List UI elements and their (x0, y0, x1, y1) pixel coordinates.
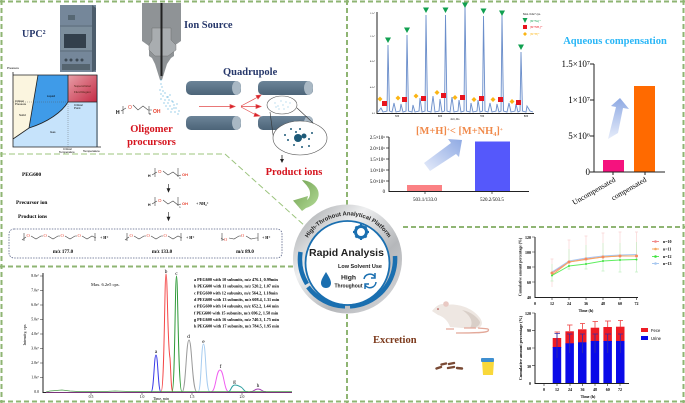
label: oligomer procursors: procursors (127, 137, 176, 148)
chart axes: Time, min (153, 397, 169, 402)
chart: phase diagram: Pressure (7, 66, 19, 70)
panel: mass spectrum and charts (370, 2, 667, 207)
legend: spectrum ions: [M+H]⁺ (530, 32, 540, 36)
label: high throughput: High (341, 274, 356, 282)
chart: cumulative stacked bar chart: 0 (529, 381, 531, 386)
peak labels: f (220, 363, 222, 370)
legend: stacked bars (641, 328, 662, 341)
chart: phase diagram: Critical (63, 147, 72, 151)
arrow: gradient up compensation (608, 98, 629, 139)
chart: cumulative line chart: Time (h) (579, 308, 594, 313)
chart: cumulative line chart: 36 (584, 301, 588, 306)
icon: magnified product ions (267, 96, 327, 163)
chart: adduct bar chart (370, 135, 529, 203)
chart axes: 3.0e⁷ (31, 346, 40, 350)
chart: mass spectrum: 800 (524, 115, 529, 118)
callout: product ion fragments: O (78, 233, 82, 238)
callout: product ion fragments: O (241, 233, 245, 238)
callout: product ion fragments: + H⁺ (186, 235, 195, 240)
peak labels: d (187, 334, 190, 340)
chart: compensation bars: 5×10⁶ (568, 131, 590, 141)
chart: cumulative stacked bar chart: 0 (543, 387, 545, 392)
callout: product ion fragments: m/z 89.0 (236, 250, 254, 255)
legend: spectrum ions: [M+Na]⁺ (530, 19, 541, 23)
callout: product ion fragments: O (224, 237, 228, 242)
legend: PEG600 subunits (194, 277, 280, 329)
arrows: ion path (199, 95, 261, 116)
molecule: PEG600 (148, 168, 188, 180)
chart: mass spectrum: 500 (395, 115, 400, 118)
icon: spray droplets (160, 80, 179, 114)
chart: adduct bar chart: 2.0×10⁶ (370, 146, 385, 152)
chart: mass spectrum: m/z, Da (451, 118, 460, 121)
legend: PEG600 subunits: a PEG600 with 10 subunits, m/z 476.1, 0.99min (194, 277, 279, 282)
chart: cumulative line chart: 12 (550, 301, 554, 306)
molecule: PEG600: H (148, 174, 151, 178)
chart: compensation bars: compensated (610, 175, 648, 202)
label: product ions row: Product ions (18, 214, 47, 220)
callout: product ion fragments: O (146, 233, 150, 238)
chart axes: Intensity, cps (22, 324, 28, 346)
icon: oligomer molecule: O (128, 105, 132, 111)
molecule: precursor: O (158, 198, 162, 203)
chart axes (22, 273, 292, 402)
chart axes: 0.5 (89, 395, 93, 399)
label: high throughput (334, 274, 363, 290)
chart: cumulative stacked bar chart: 90 (527, 328, 531, 333)
legend: spectrum ions (522, 13, 543, 36)
chart: cumulative stacked bar chart: 12 (555, 387, 559, 392)
chart: phase diagram: Supercritical (74, 84, 91, 88)
heading: adduct comparison: [M+H] (416, 126, 447, 137)
chart: adduct bar chart: 503.1/133.0 (413, 198, 437, 203)
chart: compensation bars: 1.5×10⁷ (562, 59, 590, 69)
callout: product ion fragments: O (130, 233, 134, 238)
chart: phase diagram: Point (74, 106, 81, 110)
chart: adduct bar chart: 520.2/503.5 (480, 198, 504, 203)
heading: excretion: Excretion (373, 335, 417, 346)
chart: adduct bar chart: 1.5×10⁶ (370, 157, 385, 163)
icon: refresh (364, 273, 376, 289)
icon: urine cup (481, 358, 494, 375)
chart: cumulative line chart (518, 232, 638, 313)
chart axes: 2.0 (240, 395, 244, 399)
legend: PEG600 subunits: c PEG600 with 12 subunits, m/z 564.2, 1.18min (194, 290, 278, 295)
molecule: PEG600: OH (182, 172, 188, 177)
chart: cumulative line chart: 60 (527, 280, 531, 285)
chart: phase diagram: Critical (74, 103, 83, 107)
icon: rat (432, 301, 489, 333)
icon: feces (436, 363, 462, 368)
chart: mass spectrum: 700 (480, 115, 485, 118)
molecule: precursor: + NH₄⁺ (196, 201, 209, 206)
callout: product ion fragments: + H⁺ (262, 235, 271, 240)
callout: product ion fragments: O (26, 233, 30, 238)
heading: Ion Source: Ion Source (184, 20, 233, 31)
chart: cumulative stacked bar chart: 120 (525, 311, 531, 316)
label: oligomer procursors (127, 124, 176, 148)
chart: cumulative line chart: 0 (534, 301, 536, 306)
icon: oligomer molecule: n (149, 112, 151, 116)
chart: cumulative line chart: 80 (527, 265, 531, 270)
chart: cumulative stacked bar chart: 30 (527, 364, 531, 369)
chart: adduct bar chart: 1.0×10⁶ (370, 168, 385, 174)
chart axes: 0.0 (34, 390, 39, 394)
panel: PEG600 fragmentation (9, 168, 282, 258)
chart: mass spectrum: 1.5e⁷ (370, 12, 375, 15)
label: product ions: Product ions (266, 167, 322, 178)
panel: ion source and quadrupole (116, 3, 327, 178)
chart: adduct bar chart: 5.0×10⁵ (370, 179, 385, 185)
label: oligomer procursors: Oligomer (130, 124, 173, 135)
icon: UPC2 instrument (60, 5, 96, 72)
chart: cumulative stacked bar chart: 36 (580, 387, 584, 392)
arrow: down (167, 184, 170, 192)
chart: phase diagram: Critical (15, 99, 24, 103)
callout: product ion fragments: O (164, 233, 168, 238)
chart: mass spectrum: 0.0 (372, 112, 376, 115)
heading: aqueous compensation: Aqueous compensation (563, 36, 667, 47)
callout: product ion fragments: + H⁺ (100, 235, 109, 240)
chart axes: 7.0e⁷ (31, 288, 40, 292)
chart: cumulative line chart: 24 (567, 301, 571, 306)
chart: phase diagram: Temperature (59, 150, 75, 154)
peak labels: h (257, 383, 260, 389)
peak labels: b (165, 269, 168, 275)
legend: stacked bars: Fece (651, 328, 661, 333)
legend: line chart (652, 239, 672, 266)
legend: line chart: n=10 (663, 239, 672, 244)
legend: line chart: n=11 (663, 246, 671, 252)
chart: cumulative stacked bar chart: Cumulative amount percentage (%) (518, 315, 523, 380)
chart: compensation bars: 1×10⁷ (568, 95, 590, 105)
chart axes: 6.0e⁷ (31, 303, 40, 307)
peak labels: g (233, 379, 236, 385)
heading: UPC2: 2 (43, 30, 46, 36)
chart: mass spectrum: 8.0e⁶ (370, 60, 375, 63)
chart: compensation bars: 0 (586, 167, 590, 177)
label: precursor ion: Precursor ion (16, 200, 47, 206)
chart: cumulative line chart: Cumulative amount percentage (%) (518, 237, 522, 296)
legend: PEG600 subunits: b PEG600 with 11 subunits, m/z 520.2, 1.07 min (194, 284, 280, 289)
chart: phase diagram: Solid (19, 113, 26, 117)
chart axes: 1.0 (140, 395, 144, 399)
chart: cumulative line chart: 40 (527, 295, 531, 300)
label: max intensity: Max. 6.2e5 cps. (91, 282, 120, 287)
chart: cumulative stacked bar chart: 72 (618, 387, 622, 392)
callout: product ion fragments: m/z 177.0 (53, 250, 74, 255)
heading: UPC2: UPC (22, 29, 43, 40)
arc text: platform: High-Throhout Analytical Platform (304, 211, 390, 238)
chart: mass spectrum: 4.0e⁶ (370, 86, 375, 89)
icon: oligomer molecule: OH (153, 109, 161, 115)
molecule: precursor: n (179, 206, 181, 209)
molecule: precursor: OH (182, 201, 188, 206)
peak labels: e (202, 339, 205, 345)
chart: cumulative stacked bar chart: Time (h) (581, 394, 596, 399)
legend: PEG600 subunits: e PEG600 with 14 subunits, m/z 652.2, 1.44 min (194, 304, 279, 309)
chart: cumulative stacked bar chart: 60 (606, 387, 610, 392)
molecule: PEG600: O (158, 169, 162, 174)
chart: mass spectrum: 1.2e⁷ (370, 35, 375, 38)
arrow: down (167, 212, 170, 220)
chart axes: 5.0e⁷ (31, 318, 40, 322)
peak labels: a (155, 349, 158, 355)
chart: cumulative stacked bar chart: 48 (593, 387, 597, 392)
chart: cumulative stacked bar chart: 24 (568, 387, 572, 392)
icon: gear (353, 224, 369, 240)
chart: phase diagram: Liquid (47, 94, 55, 98)
panel: UPC2 separation (7, 5, 101, 154)
icon: green curved arrow (293, 180, 319, 211)
legend: line chart: n=13 (663, 261, 672, 266)
legend: spectrum ions: Max. 6.6e7 cps. (523, 13, 541, 16)
chart axes: 1.0e⁷ (31, 376, 40, 380)
badge: rapid analysis (293, 204, 402, 314)
blue arcs (300, 252, 395, 306)
panel: chromatogram (22, 269, 292, 402)
molecule: PEG600: n (179, 177, 181, 180)
callout: product ion fragments: O (44, 233, 48, 238)
chart: mass spectrum (370, 2, 534, 121)
chart: phase diagram (7, 66, 101, 154)
peak labels (155, 269, 260, 389)
callout: product ion fragments (9, 229, 282, 258)
legend: line chart: n=12 (663, 254, 672, 259)
icon: quadrupole rods (186, 81, 313, 130)
chart: chromatogram peaks (46, 274, 292, 392)
chart: phase diagram: Temperature (83, 149, 100, 153)
heading: Quadrupole: Quadrupole (223, 67, 278, 78)
chart: cumulative stacked bar chart: 60 (527, 346, 531, 351)
chart: compensation bars: Uncompensated (571, 175, 617, 207)
chart axes: 4.0e⁷ (31, 332, 40, 336)
legend: PEG600 subunits: d PEG600 with 13 subunits, m/z 608.4, 1.31 min (194, 297, 280, 302)
molecule: precursor: H (148, 203, 151, 207)
label: PEG600: PEG600 (22, 172, 41, 178)
chart: cumulative line chart: 48 (601, 301, 605, 306)
chart: compensation bars (562, 59, 665, 207)
icon: water drop (321, 272, 331, 288)
callout: product ion fragments: O (60, 233, 64, 238)
chart: phase diagram: Fluid Region (74, 90, 91, 94)
title: rapid analysis: Rapid Analysis (309, 247, 384, 259)
chart: mass spectrum: 600 (438, 115, 443, 118)
heading: adduct comparison: + (447, 127, 450, 133)
chart: cumulative line chart: 100 (525, 250, 531, 255)
icon: oligomer molecule (116, 105, 161, 116)
chart: adduct bar chart: 2.5×10⁶ (370, 135, 385, 141)
chart axes: 8.0e⁷ (31, 274, 40, 278)
heading: adduct comparison: + (500, 127, 503, 133)
chart: cumulative line chart: 120 (525, 235, 531, 240)
panel: excretion (373, 232, 672, 399)
legend: spectrum ions: [M+NH₄]⁺ (530, 25, 543, 29)
chart axes: 1.5 (190, 395, 194, 399)
heading: adduct comparison: < [M+NH₄] (450, 126, 500, 137)
legend: PEG600 subunits: g PEG600 with 16 subunits, m/z 740.3, 1.75 min (194, 317, 280, 322)
arrow: gradient up adduct (424, 139, 462, 171)
legend: stacked bars: Urine (651, 336, 662, 341)
chart: cumulative stacked bar chart (518, 311, 629, 399)
label: high throughput: Throughout (334, 284, 363, 290)
peak labels: c (175, 271, 178, 277)
callout: product ion fragments: m/z 133.0 (152, 250, 173, 255)
chart: phase diagram: Pressure (15, 102, 27, 106)
chart: cumulative line chart: 60 (618, 301, 622, 306)
label: low solvent use: Low Solvent Use (338, 264, 382, 270)
chart: adduct bar chart: 0 (383, 190, 386, 195)
molecule: precursor (148, 197, 209, 209)
legend: PEG600 subunits: h PEG600 with 17 subunits, m/z 784.5, 1.95 min (194, 324, 280, 329)
icon: oligomer molecule: H (116, 110, 120, 116)
chart: phase diagram: Gas (50, 130, 56, 134)
chart: cumulative line chart: 72 (634, 301, 638, 306)
icon: ion source nozzle (142, 3, 181, 80)
legend: PEG600 subunits: f PEG600 with 15 subunits, m/z 696.2, 1.58 min (194, 310, 279, 315)
chart axes: 2.0e⁷ (31, 361, 40, 365)
